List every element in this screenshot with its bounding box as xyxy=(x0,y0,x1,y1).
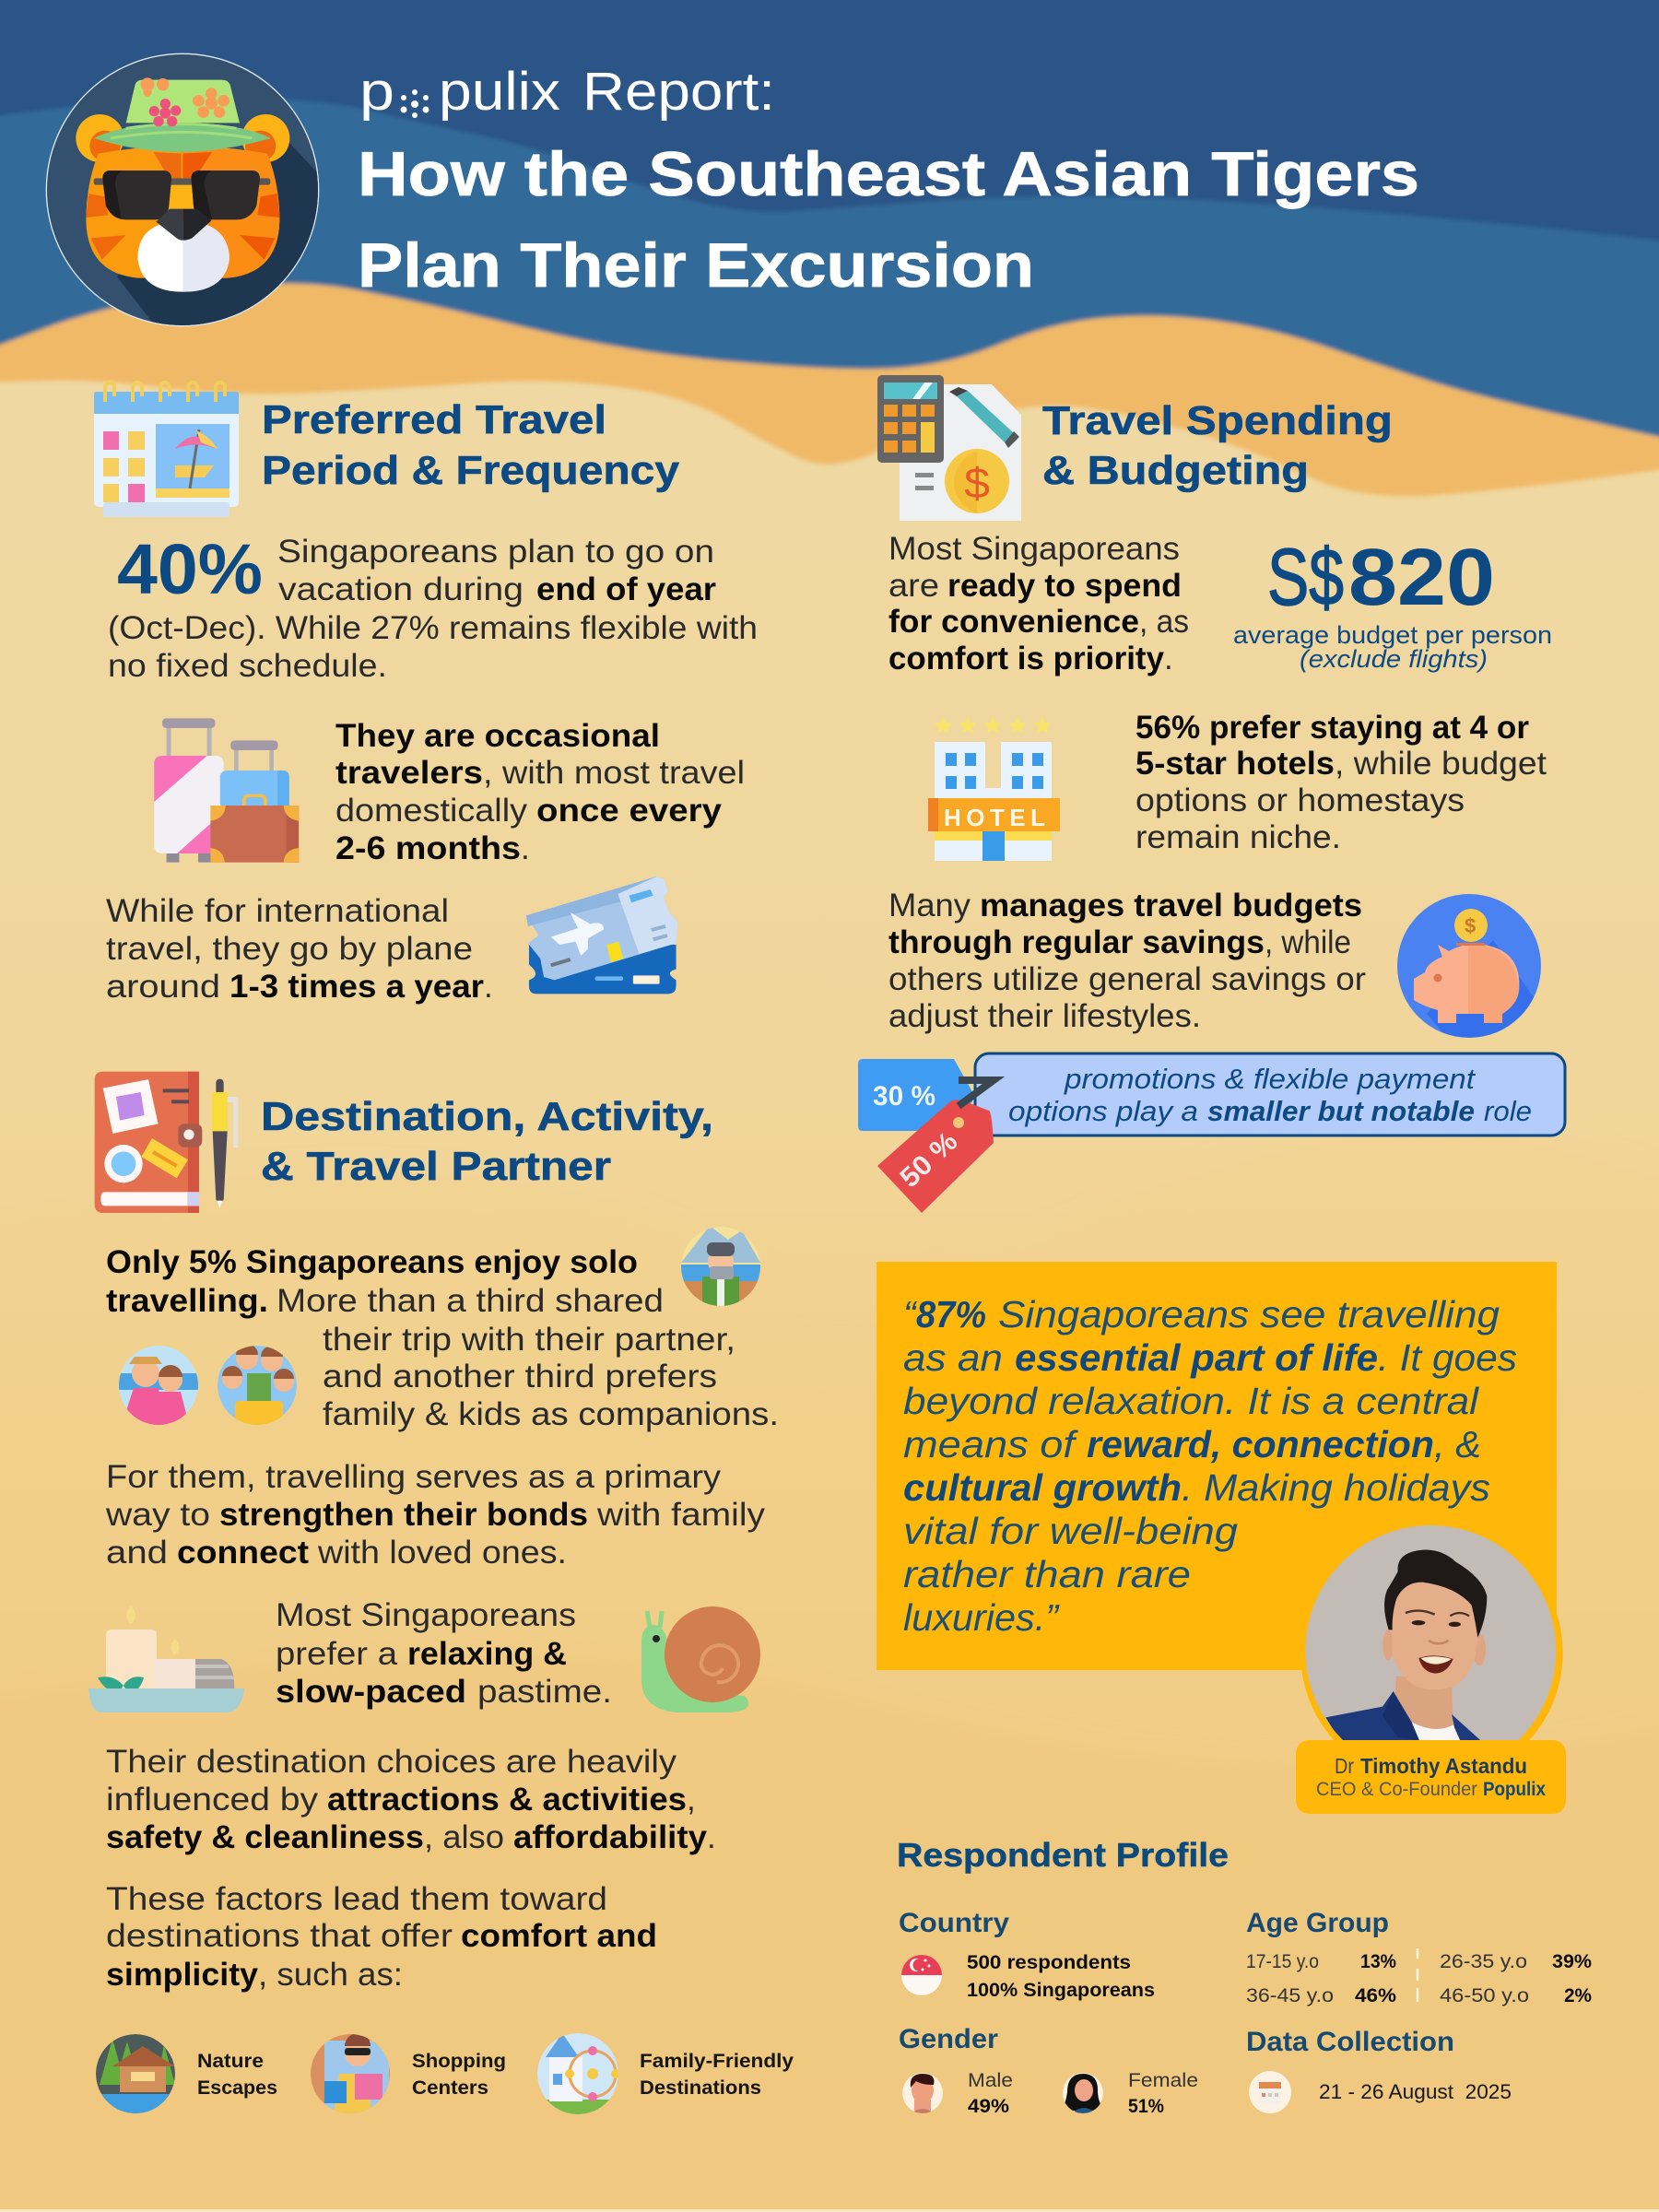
text: 56% hotels: 5-star hotels xyxy=(1135,746,1335,782)
destination: Family-Friendly Destinations: Destinations xyxy=(640,2077,761,2099)
text: relaxing and slow-paced: Most Singaporeans xyxy=(276,1597,576,1633)
heading: Destination, Activity, & Travel Partner: Destination, Activity, xyxy=(261,1094,713,1139)
text: savings: manages travel budgets xyxy=(980,888,1362,924)
text: international travel: While for international xyxy=(106,893,449,929)
text: 56% hotels: options or homestays xyxy=(1135,782,1465,818)
profile: Country: 100% Singaporeans xyxy=(967,1980,1155,2001)
icon: piggy bank: $ xyxy=(1465,914,1476,937)
quote text: Singaporeans see travelling xyxy=(998,1293,1500,1335)
text: relaxing and slow-paced xyxy=(276,1597,612,1710)
profile: Data Collection: Data Collection xyxy=(1246,2027,1454,2057)
profile: Age Group: 39% xyxy=(1552,1951,1592,1972)
title block xyxy=(358,62,1419,300)
text: strengthen bonds: with loved ones. xyxy=(317,1535,567,1571)
text: comfort and simplicity: These factors lead them toward xyxy=(106,1881,607,1917)
quote text: essential part of life xyxy=(1015,1336,1378,1379)
icon: spa candles xyxy=(88,1606,244,1712)
text: destination choices: , xyxy=(687,1782,696,1818)
text: strengthen bonds xyxy=(105,1459,766,1571)
callout: promotions and flexible payment: options play a xyxy=(1008,1095,1198,1127)
text: solo travelling: More than a third shared xyxy=(276,1283,664,1319)
text: savings: through regular savings xyxy=(888,924,1265,960)
text: relaxing and slow-paced: prefer a xyxy=(276,1636,398,1672)
caption: Dr Timothy Astandu, CEO and Co-Founder: Timothy Astandu xyxy=(1360,1754,1527,1778)
icon: luggage xyxy=(154,718,299,863)
text: ready to spend: Most Singaporeans xyxy=(888,531,1180,567)
profile: Country: 500 respondents xyxy=(967,1952,1131,1973)
stat: S$820 average budget: S$ xyxy=(1267,533,1344,622)
stat: S$820 average budget: (exclude flights) xyxy=(1300,645,1488,673)
text: ready to spend: comfort is priority xyxy=(888,641,1165,677)
icon: calendar with beach xyxy=(94,382,239,517)
quote text: beyond relaxation. It is a central xyxy=(903,1380,1480,1422)
caption: Dr Timothy Astandu, CEO and Co-Founder: Dr xyxy=(1335,1754,1354,1778)
icon: hotel with five stars: HOTEL xyxy=(944,804,1045,831)
callout: promotions and flexible payment: promotions & flexible payment xyxy=(1064,1063,1476,1095)
text: strengthen bonds: strengthen their bonds xyxy=(219,1497,588,1533)
quote text: cultural growth xyxy=(903,1466,1182,1509)
heading: Travel Spending & Budgeting: Travel Spending xyxy=(1042,398,1393,443)
icon: couple xyxy=(119,1346,198,1425)
text: international travel: . xyxy=(484,969,493,1005)
icon: Singapore flag xyxy=(901,1955,942,1995)
icon: cabin in nature xyxy=(96,2034,175,2114)
text: international travel: around xyxy=(106,969,220,1005)
text: occasional travelers: 2-6 months xyxy=(335,830,521,866)
text: 40% travel end of year: no fixed schedule. xyxy=(108,648,387,684)
stat: S$820 average budget: average budget per person xyxy=(1233,621,1552,649)
profile: Age Group xyxy=(1246,1908,1592,2006)
text: 56% hotels: 56% prefer staying at 4 or xyxy=(1135,710,1529,746)
quote text: as an xyxy=(903,1336,1003,1379)
icon: hotel with five stars xyxy=(928,716,1060,861)
text: occasional travelers: travelers xyxy=(335,755,483,791)
heading: Destination, Activity, & Travel Partner xyxy=(261,1094,713,1189)
profile: Gender: Gender xyxy=(899,2024,998,2054)
profile: Age Group: Age Group xyxy=(1246,1908,1389,1938)
icon: family with kids xyxy=(218,1344,297,1427)
text: strengthen bonds: and xyxy=(106,1535,168,1571)
icon: notebook and pen xyxy=(95,1072,238,1213)
quote text: “ xyxy=(903,1293,918,1335)
destination: Family-Friendly Destinations xyxy=(537,2033,794,2116)
quote text: , & xyxy=(1434,1423,1481,1465)
icon: snail xyxy=(641,1606,760,1712)
text: destination choices: affordability xyxy=(513,1819,708,1855)
profile: Age Group: 2% xyxy=(1564,1985,1592,2006)
text: ready to spend: ready to spend xyxy=(947,568,1182,604)
icon: shopper xyxy=(311,2033,390,2114)
text: destination choices: . xyxy=(707,1819,716,1855)
quote text: 87% xyxy=(916,1293,986,1335)
text: solo travelling: travelling. xyxy=(106,1283,268,1319)
destination: Shopping Centers: Centers xyxy=(412,2077,488,2099)
text: 56% hotels: , while budget xyxy=(1335,746,1547,782)
profile: Gender xyxy=(899,2024,1198,2117)
text: occasional travelers: once every xyxy=(536,793,723,829)
icon: plane ticket xyxy=(526,877,677,994)
brand line: populix Report: Report: xyxy=(582,62,775,122)
text: comfort and simplicity: , such as: xyxy=(258,1957,403,1993)
text: savings: Many xyxy=(888,888,971,924)
caption: Dr Timothy Astandu, CEO and Co-Founder: CEO & Co-Founder xyxy=(1316,1779,1477,1800)
caption: Dr Timothy Astandu, CEO and Co-Founder xyxy=(1296,1740,1566,1814)
text: destination choices: influenced by xyxy=(106,1782,319,1818)
text: relaxing and slow-paced: relaxing & xyxy=(407,1636,567,1672)
panel: quote xyxy=(877,1262,1557,1670)
callout: promotions and flexible payment: smaller but notable xyxy=(1207,1095,1475,1127)
text: solo travelling: family & kids as companions. xyxy=(323,1396,779,1432)
brand line: populix Report xyxy=(359,62,775,122)
text: 40% travel end of year: vacation during xyxy=(278,571,524,607)
text: savings: , while xyxy=(1265,924,1351,960)
text: ready to spend: , as xyxy=(1139,604,1189,640)
quote text: . It goes xyxy=(1378,1336,1517,1379)
main title: Plan Their Excursion xyxy=(358,230,1034,300)
stat: S$820 average budget xyxy=(1233,533,1552,673)
text: destination choices: Their destination choices are heavily xyxy=(106,1744,677,1780)
icon: male avatar xyxy=(902,2073,943,2116)
heading: Travel Spending & Budgeting xyxy=(1042,398,1393,493)
destination: Shopping Centers xyxy=(311,2033,506,2114)
profile: Country xyxy=(899,1908,1155,2001)
icon: calculator, document and coin: $ xyxy=(964,459,990,507)
icon: calendar xyxy=(1249,2071,1291,2113)
heading: Preferred Travel Period & Frequency: Period & Frequency xyxy=(262,448,680,493)
stat: 40%: 40% xyxy=(117,530,263,609)
text: destination choices: , also xyxy=(424,1819,504,1855)
text: strengthen bonds: with family xyxy=(596,1497,766,1533)
text: comfort and simplicity xyxy=(106,1881,657,1993)
profile: Gender: 49% xyxy=(968,2096,1009,2117)
text: strengthen bonds: For them, travelling serves as a primary xyxy=(106,1459,722,1495)
text: 40% travel end of year: (Oct-Dec). While 27% remains flexible with xyxy=(108,610,758,646)
caption: Dr Timothy Astandu, CEO and Co-Founder: Populix xyxy=(1483,1779,1546,1800)
icon: castle and ferris wheel xyxy=(537,2033,620,2116)
text: occasional travelers: They are occasional xyxy=(335,718,660,754)
destination: Family-Friendly Destinations: Family-Friendly xyxy=(640,2051,794,2072)
icon: solo traveller xyxy=(681,1226,760,1309)
icon: discount tags 30% and 50%: 30 % xyxy=(873,1081,935,1112)
heading: Travel Spending & Budgeting: & Budgeting xyxy=(1042,448,1309,493)
callout: promotions and flexible payment: role xyxy=(1484,1095,1532,1127)
profile: Gender: Male xyxy=(968,2070,1013,2091)
text: 40% travel end of year xyxy=(108,534,758,684)
heading: Destination, Activity, & Travel Partner: & Travel Partner xyxy=(261,1144,611,1189)
text: occasional travelers xyxy=(335,718,745,866)
icon: female avatar xyxy=(1063,2073,1103,2113)
text: solo travelling: Only 5% Singaporeans enjoy solo xyxy=(106,1244,638,1280)
text: savings: others utilize general savings or xyxy=(888,961,1366,997)
text: ready to spend: are xyxy=(888,568,939,604)
quote text xyxy=(903,1293,1517,1639)
text: destination choices: safety & cleanliness xyxy=(106,1819,424,1855)
text: ready to spend: for convenience xyxy=(888,604,1139,640)
text: international travel: 1-3 times a year xyxy=(229,969,484,1005)
stat: S$820 average budget: 820 xyxy=(1348,533,1495,622)
text: occasional travelers: domestically xyxy=(335,793,528,829)
quote text: . Making holidays xyxy=(1182,1466,1490,1509)
brand line: populix Report: pulix xyxy=(439,62,560,122)
quote text: luxuries.” xyxy=(903,1596,1060,1639)
icon: discount tags 30% and 50% xyxy=(858,1059,994,1213)
text: 40% travel end of year: end of year xyxy=(536,571,716,607)
profile: Age Group: 26-35 y.o xyxy=(1440,1951,1527,1972)
text: international travel: travel, they go by plane xyxy=(106,931,473,967)
heading: Preferred Travel Period & Frequency xyxy=(262,397,680,493)
text: solo travelling: and another third prefers xyxy=(323,1359,717,1394)
text: strengthen bonds: connect xyxy=(177,1535,309,1571)
text: destination choices xyxy=(106,1744,716,1855)
profile: Age Group: 36-45 y.o xyxy=(1246,1985,1334,2006)
icon: calculator, document and coin xyxy=(877,375,1021,521)
profile: Gender: 51% xyxy=(1128,2096,1164,2117)
profile: Country: Country xyxy=(899,1908,1009,1938)
profile: Age Group: 13% xyxy=(1360,1951,1396,1972)
text: comfort and simplicity: comfort and xyxy=(461,1918,657,1954)
brand line: populix Report: p xyxy=(359,62,394,122)
text: destination choices: attractions & activities xyxy=(327,1782,687,1818)
portrait: Dr Timothy Astandu xyxy=(1301,1525,1563,1740)
quote text: vital for well-being xyxy=(903,1510,1238,1552)
destination: Nature Escapes xyxy=(96,2034,277,2114)
destination: Nature Escapes: Escapes xyxy=(197,2077,277,2099)
text: occasional travelers: , with most travel xyxy=(483,755,745,791)
text: strengthen bonds: way to xyxy=(105,1497,210,1533)
text: comfort and simplicity: simplicity xyxy=(106,1957,259,1993)
text: occasional travelers: . xyxy=(521,830,530,866)
text: comfort and simplicity: destinations that offer xyxy=(106,1918,453,1954)
icon: discount tags 30% and 50%: 50 % xyxy=(894,1126,963,1194)
profile: Age Group: 46% xyxy=(1355,1985,1396,2006)
profile: Age Group: 46-50 y.o xyxy=(1440,1985,1529,2006)
text: 40% travel end of year: Singaporeans plan to go on xyxy=(277,534,714,570)
text: solo travelling: their trip with their partner, xyxy=(323,1322,735,1358)
text: solo travelling xyxy=(106,1244,779,1432)
profile: Age Group: 17-15 y.o xyxy=(1246,1951,1319,1972)
text: savings: adjust their lifestyles. xyxy=(888,998,1201,1034)
profile: Gender: Female xyxy=(1128,2070,1198,2091)
quote text: means of xyxy=(903,1423,1078,1465)
profile: Data Collection xyxy=(1246,2027,1512,2113)
icon: tiger with hat and sunglasses xyxy=(46,53,323,341)
text: 56% hotels: remain niche. xyxy=(1135,819,1341,855)
text: savings xyxy=(888,888,1366,1034)
main title: How the Southeast Asian Tigers xyxy=(358,139,1419,209)
heading: Respondent Profile: Respondent Profile xyxy=(897,1836,1229,1874)
destination: Nature Escapes: Nature xyxy=(197,2051,264,2072)
text: relaxing and slow-paced: pastime. xyxy=(477,1674,612,1710)
text: 56% hotels xyxy=(1135,710,1547,855)
icon: piggy bank xyxy=(1397,894,1541,1038)
callout: promotions and flexible payment xyxy=(975,1053,1565,1135)
destination: Shopping Centers: Shopping xyxy=(412,2051,506,2072)
quote text: rather than rare xyxy=(903,1553,1191,1595)
text: international travel xyxy=(106,893,493,1005)
heading: Preferred Travel Period & Frequency: Preferred Travel xyxy=(262,397,606,442)
quote text: reward, connection xyxy=(1087,1423,1434,1465)
main title xyxy=(358,139,1419,300)
text: ready to spend xyxy=(888,531,1189,677)
text: ready to spend: . xyxy=(1164,641,1173,677)
text: relaxing and slow-paced: slow-paced xyxy=(276,1674,466,1710)
profile: Data Collection: 21 - 26 August 2025 xyxy=(1319,2080,1512,2103)
